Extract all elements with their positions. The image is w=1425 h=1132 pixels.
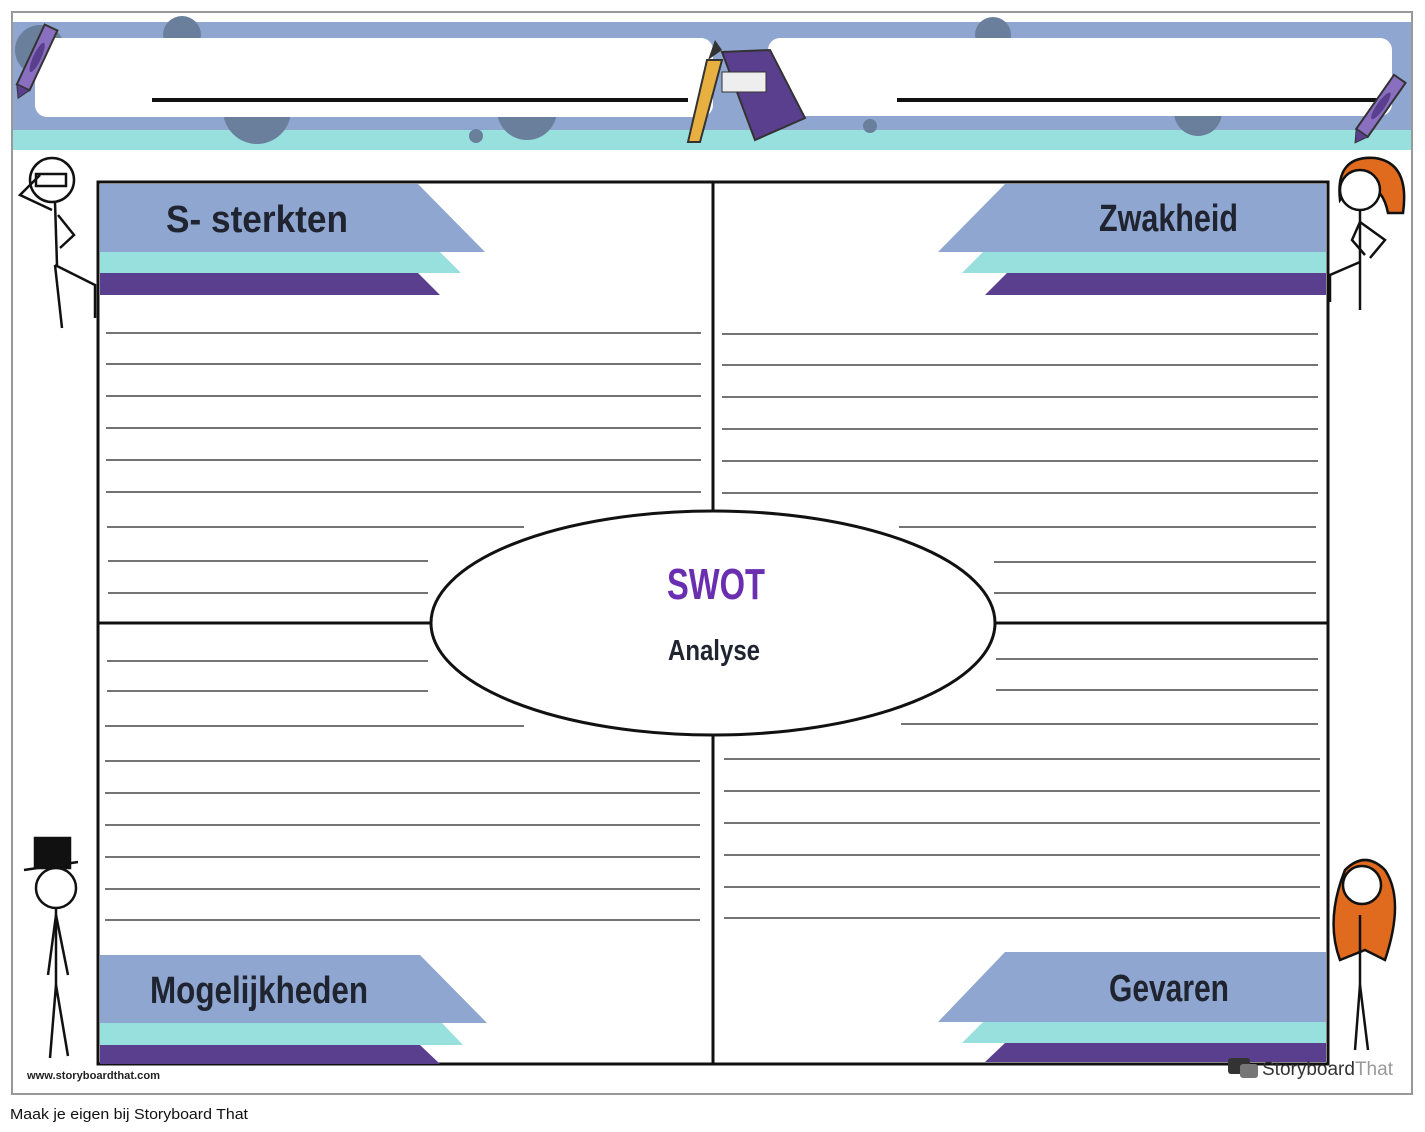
icon: pencil and crayon box	[688, 40, 805, 142]
stick figure: top hat man	[24, 838, 78, 1058]
banner: Gevaren: Gevaren	[1109, 968, 1229, 1010]
center ellipse: SWOT Analyse: Analyse	[668, 635, 760, 667]
icon: crayon right	[1349, 75, 1406, 147]
center ellipse: SWOT Analyse: SWOT	[667, 560, 765, 609]
banner: Mogelijkheden: Mogelijkheden	[150, 970, 368, 1012]
stick figure: red hair woman top	[1330, 158, 1404, 310]
banner: S- sterkten	[100, 184, 485, 295]
stick figure: red hair woman bottom	[1334, 860, 1395, 1050]
caption: Maak je eigen bij Storyboard That	[10, 1106, 249, 1123]
banner: Zwakheid	[938, 184, 1326, 295]
banner: S- sterkten: S- sterkten	[166, 199, 348, 241]
name box	[35, 38, 713, 117]
date box	[768, 38, 1392, 116]
banner: Mogelijkheden	[100, 955, 487, 1064]
icon: crayon left	[12, 25, 57, 101]
banner: Gevaren	[938, 952, 1326, 1062]
logo: StoryboardThat: StoryboardThat	[1262, 1059, 1394, 1080]
center ellipse: SWOT Analyse	[431, 511, 995, 735]
quadrant grid	[98, 182, 1328, 1064]
writing lines	[105, 333, 1320, 920]
header band	[13, 16, 1411, 150]
banner: Zwakheid: Zwakheid	[1099, 198, 1238, 240]
stick figure: glasses man	[20, 158, 95, 328]
footer url: www.storyboardthat.com	[26, 1070, 160, 1082]
